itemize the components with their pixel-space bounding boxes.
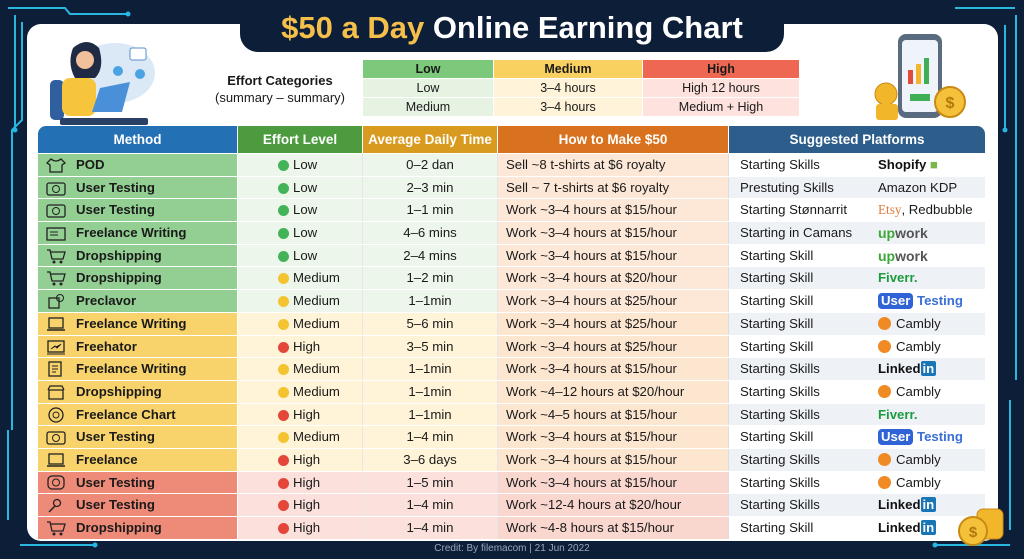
table rows: Freelance Writing [76, 361, 186, 376]
table rows: 5–6 min [407, 316, 453, 331]
table rows: Work ~3–4 hours at $25/hour [506, 338, 677, 354]
table rows: Shopify ■ [878, 157, 938, 172]
table rows: Preclavor [76, 293, 136, 308]
table rows: High [293, 338, 320, 354]
table rows: Starting Skill [740, 248, 813, 263]
table rows: User Testing [76, 429, 155, 444]
table rows: Low [293, 248, 317, 263]
effort categories label [215, 73, 345, 105]
table rows: Work ~12-4 hours at $20/hour [506, 497, 681, 512]
table rows: Work ~3–4 hours at $20/hour [506, 270, 677, 285]
table rows: Amazon KDP [878, 180, 957, 195]
table rows: Medium [293, 293, 340, 308]
table rows: Fiverr. [878, 270, 918, 285]
table rows: High [293, 452, 320, 467]
table rows: Fiverr. [878, 407, 918, 422]
table rows: Medium [293, 270, 340, 285]
table rows: User [881, 429, 910, 444]
table rows: Starting Skill [740, 293, 813, 308]
icon: coin stack: $ [969, 524, 978, 541]
table rows: Work ~4-8 hours at $15/hour [506, 520, 674, 535]
table rows: Work ~3–4 hours at $15/hour [506, 248, 677, 263]
table rows: Low [293, 180, 317, 195]
table rows: Starting Skills [740, 407, 820, 422]
table rows: User Testing [76, 202, 155, 217]
table rows: Starting Skills [740, 475, 820, 490]
table rows: Starting Skill [740, 429, 813, 444]
table rows: Starting Skill [740, 338, 813, 354]
table rows: Linkedin [878, 520, 934, 535]
table rows: Cambly [896, 316, 941, 331]
effort categories table: High 12 hours [682, 81, 760, 95]
effort categories table [363, 60, 799, 116]
table rows: upwork [878, 248, 928, 264]
table rows: Linkedin [878, 361, 934, 376]
table rows: Work ~3–4 hours at $15/hour [506, 202, 677, 217]
table rows: Starting Skills [740, 497, 820, 512]
table rows: 3–5 min [407, 338, 453, 354]
table rows: 1–1min [408, 361, 452, 376]
table rows: Work ~3–4 hours at $15/hour [506, 361, 677, 376]
effort categories label: Effort Categories [227, 73, 333, 88]
title: $50 a Day Online Earning Chart [281, 10, 743, 45]
table rows: Dropshipping [76, 248, 162, 263]
table rows: Medium [293, 429, 340, 444]
table header: Suggested Platforms [789, 132, 925, 147]
table rows: Starting Skills [740, 384, 820, 399]
table rows: Work ~3–4 hours at $15/hour [506, 225, 677, 240]
table rows: 1–5 min [407, 475, 453, 490]
table rows: 0–2 dan [406, 157, 454, 172]
table rows: Starting Stønnarrit [740, 202, 847, 217]
table rows: Testing [917, 293, 963, 308]
table rows: 1–4 min [407, 497, 453, 512]
table rows: User Testing [76, 475, 155, 490]
table rows [38, 154, 985, 539]
table rows: User Testing [76, 180, 155, 195]
table rows: 2–4 mins [403, 248, 457, 263]
table rows: Low [293, 157, 317, 172]
table rows: 2–3 min [407, 180, 453, 195]
table rows: Work ~4–12 hours at $20/hour [506, 384, 684, 399]
table rows: 1–1min [408, 293, 452, 308]
icon: coin stack [958, 508, 1004, 546]
table rows: Starting in Camans [740, 225, 852, 240]
table header: Effort Level [263, 132, 337, 147]
illustration: phone with chart and coins: $ [946, 95, 955, 112]
table header: Average Daily Time [368, 132, 492, 147]
effort categories table: 3–4 hours [540, 81, 596, 95]
table rows: Etsy, Redbubble [878, 202, 973, 217]
effort categories label: (summary – summary) [215, 90, 345, 105]
table rows: Dropshipping [76, 270, 162, 285]
table rows: High [293, 497, 320, 512]
table rows: Testing [917, 429, 963, 444]
table rows: User Testing [76, 497, 155, 512]
table rows: Starting Skills [740, 361, 820, 376]
illustration: woman at laptop [50, 42, 155, 125]
table rows: Medium [293, 316, 340, 331]
table rows: Freehator [76, 338, 137, 354]
credit footer: Credit: By filemacom | 21 Jun 2022 [434, 543, 590, 554]
effort categories table: Medium + High [679, 100, 763, 114]
table rows: Low [293, 225, 317, 240]
table rows: Freelance Writing [76, 225, 186, 240]
table rows: 1–4 min [407, 520, 453, 535]
effort categories table: Medium [406, 100, 450, 114]
table rows: User [881, 293, 910, 308]
table rows: Freelance Writing [76, 316, 186, 331]
table rows: Cambly [896, 338, 941, 354]
table rows: Sell ~ 7 t-shirts at $6 royalty [506, 180, 669, 195]
title [240, 0, 784, 52]
table rows: Work ~3–4 hours at $15/hour [506, 475, 677, 490]
table header [38, 126, 985, 153]
illustration: phone with chart and coins [874, 34, 966, 120]
table rows: Dropshipping [76, 384, 162, 399]
table rows: Sell ~8 t-shirts at $6 royalty [506, 157, 665, 172]
table rows: Work ~4–5 hours at $15/hour [506, 407, 677, 422]
table rows: 1–1 min [407, 202, 453, 217]
table rows: 1–2 min [407, 270, 453, 285]
table rows: 1–1min [408, 407, 452, 422]
table rows: Cambly [896, 384, 941, 399]
table rows: 4–6 mins [403, 225, 457, 240]
effort categories table: Low [417, 81, 439, 95]
effort categories table: 3–4 hours [540, 100, 596, 114]
table rows: Cambly [896, 475, 941, 490]
table rows: Medium [293, 384, 340, 399]
effort categories table: Low [416, 62, 440, 76]
table rows: Work ~3–4 hours at $25/hour [506, 293, 677, 308]
table rows: 3–6 days [403, 452, 457, 467]
table rows: upwork [878, 225, 928, 241]
effort categories table: High [707, 62, 735, 76]
table rows: Cambly [896, 452, 941, 467]
table rows: 1–1min [408, 384, 452, 399]
effort categories table: Medium [544, 62, 592, 76]
table rows: Low [293, 202, 317, 217]
table header: Method [114, 132, 162, 147]
table rows: Starting Skill [740, 316, 813, 331]
table rows: Starting Skills [740, 452, 820, 467]
table rows: Work ~3–4 hours at $15/hour [506, 429, 677, 444]
table rows: Work ~3–4 hours at $15/hour [506, 452, 677, 467]
table rows: High [293, 475, 320, 490]
table rows: Linkedin [878, 497, 934, 512]
table rows: Work ~3–4 hours at $25/hour [506, 316, 677, 331]
table rows: Dropshipping [76, 520, 162, 535]
table rows: 1–4 min [407, 429, 453, 444]
table rows: POD [76, 157, 105, 172]
table rows: High [293, 407, 320, 422]
table rows: Freelance Chart [76, 407, 176, 422]
table rows: Starting Skills [740, 157, 820, 172]
table rows: High [293, 520, 320, 535]
table rows: Starting Skill [740, 520, 813, 535]
table header: How to Make $50 [559, 132, 667, 147]
table rows: Medium [293, 361, 340, 376]
table rows: Starting Skill [740, 270, 813, 285]
table rows: Prestuting Skills [740, 180, 834, 195]
table rows: Freelance [76, 452, 138, 467]
